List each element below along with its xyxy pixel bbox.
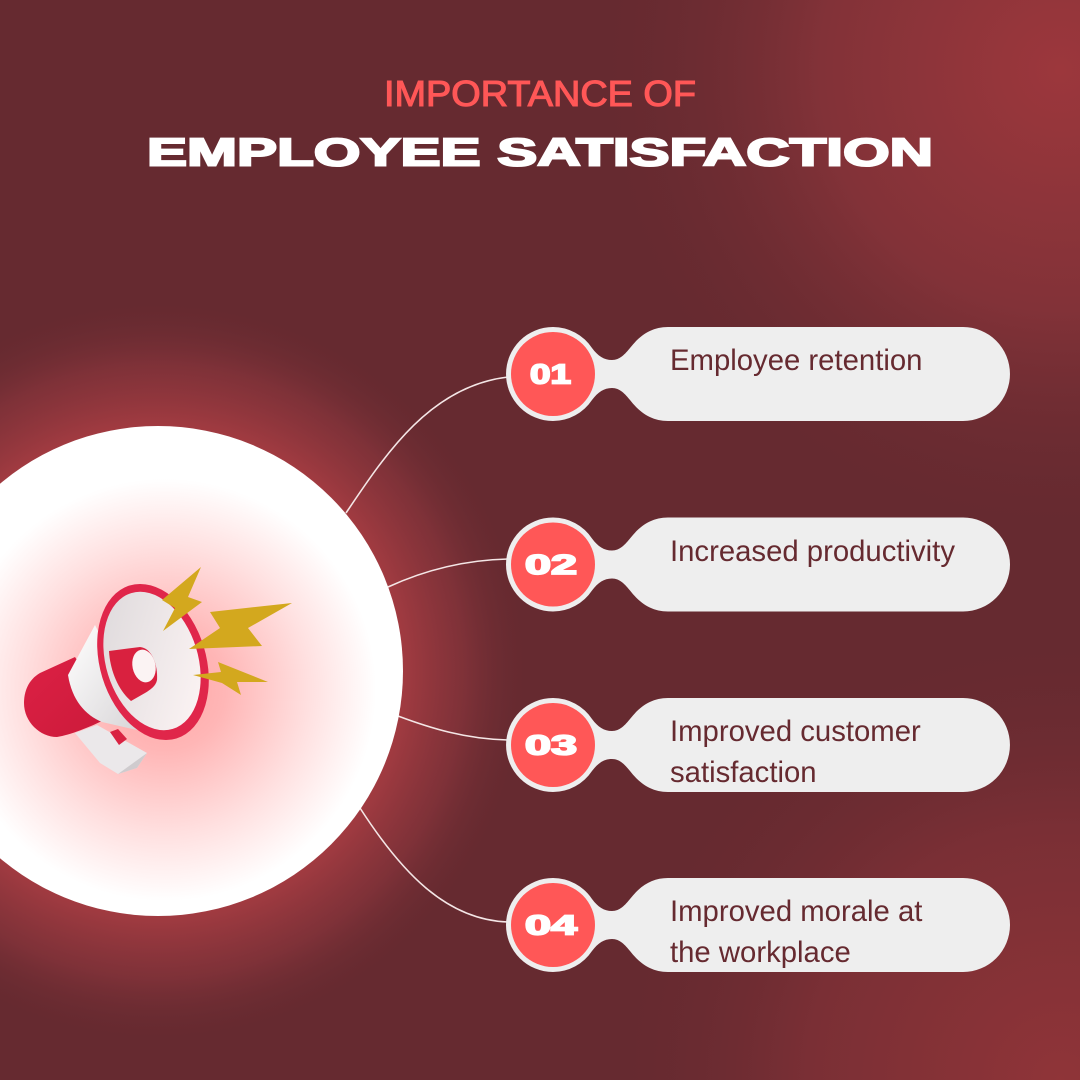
item 02 bbox=[506, 518, 1010, 612]
driver cylinder bbox=[109, 647, 157, 701]
heading: employee satisfaction: EMPLOYEE SATISFACTION bbox=[147, 132, 933, 174]
heading: importance of: IMPORTANCE OF bbox=[384, 73, 696, 114]
number: 02 bbox=[525, 549, 577, 580]
connector lines bbox=[346, 377, 508, 922]
icon: megaphone bbox=[24, 567, 292, 774]
cone bbox=[68, 625, 137, 730]
label: Improved customer bbox=[670, 715, 921, 748]
label: Increased productivity bbox=[670, 535, 955, 568]
driver cap bbox=[129, 647, 159, 685]
item 01 bbox=[506, 327, 1010, 421]
pill shape bbox=[506, 878, 1010, 972]
pill shape bbox=[506, 698, 1010, 792]
label: Employee retention bbox=[670, 344, 922, 377]
pill shape bbox=[506, 327, 1010, 421]
label second line: satisfaction bbox=[670, 756, 817, 789]
label: Improved morale at bbox=[670, 895, 922, 928]
title bbox=[147, 73, 933, 174]
number: 03 bbox=[525, 730, 577, 760]
number badge bbox=[511, 883, 595, 967]
rear barrel bbox=[24, 657, 104, 737]
number badge bbox=[511, 332, 595, 416]
horn rim bbox=[79, 570, 227, 754]
white disc bbox=[0, 426, 403, 916]
pill shape bbox=[506, 518, 1010, 612]
number badge bbox=[511, 522, 595, 606]
number: 01 bbox=[530, 358, 571, 390]
number badge bbox=[511, 703, 595, 787]
label second line: the workplace bbox=[670, 936, 851, 969]
bolt bottom bbox=[193, 662, 268, 695]
item 04 bbox=[506, 878, 1010, 972]
bolt middle bbox=[189, 603, 292, 649]
horn inner bbox=[87, 580, 217, 742]
bolt top bbox=[162, 567, 202, 631]
number: 04 bbox=[525, 910, 578, 940]
handle bbox=[75, 725, 147, 774]
item 03 bbox=[506, 698, 1010, 792]
